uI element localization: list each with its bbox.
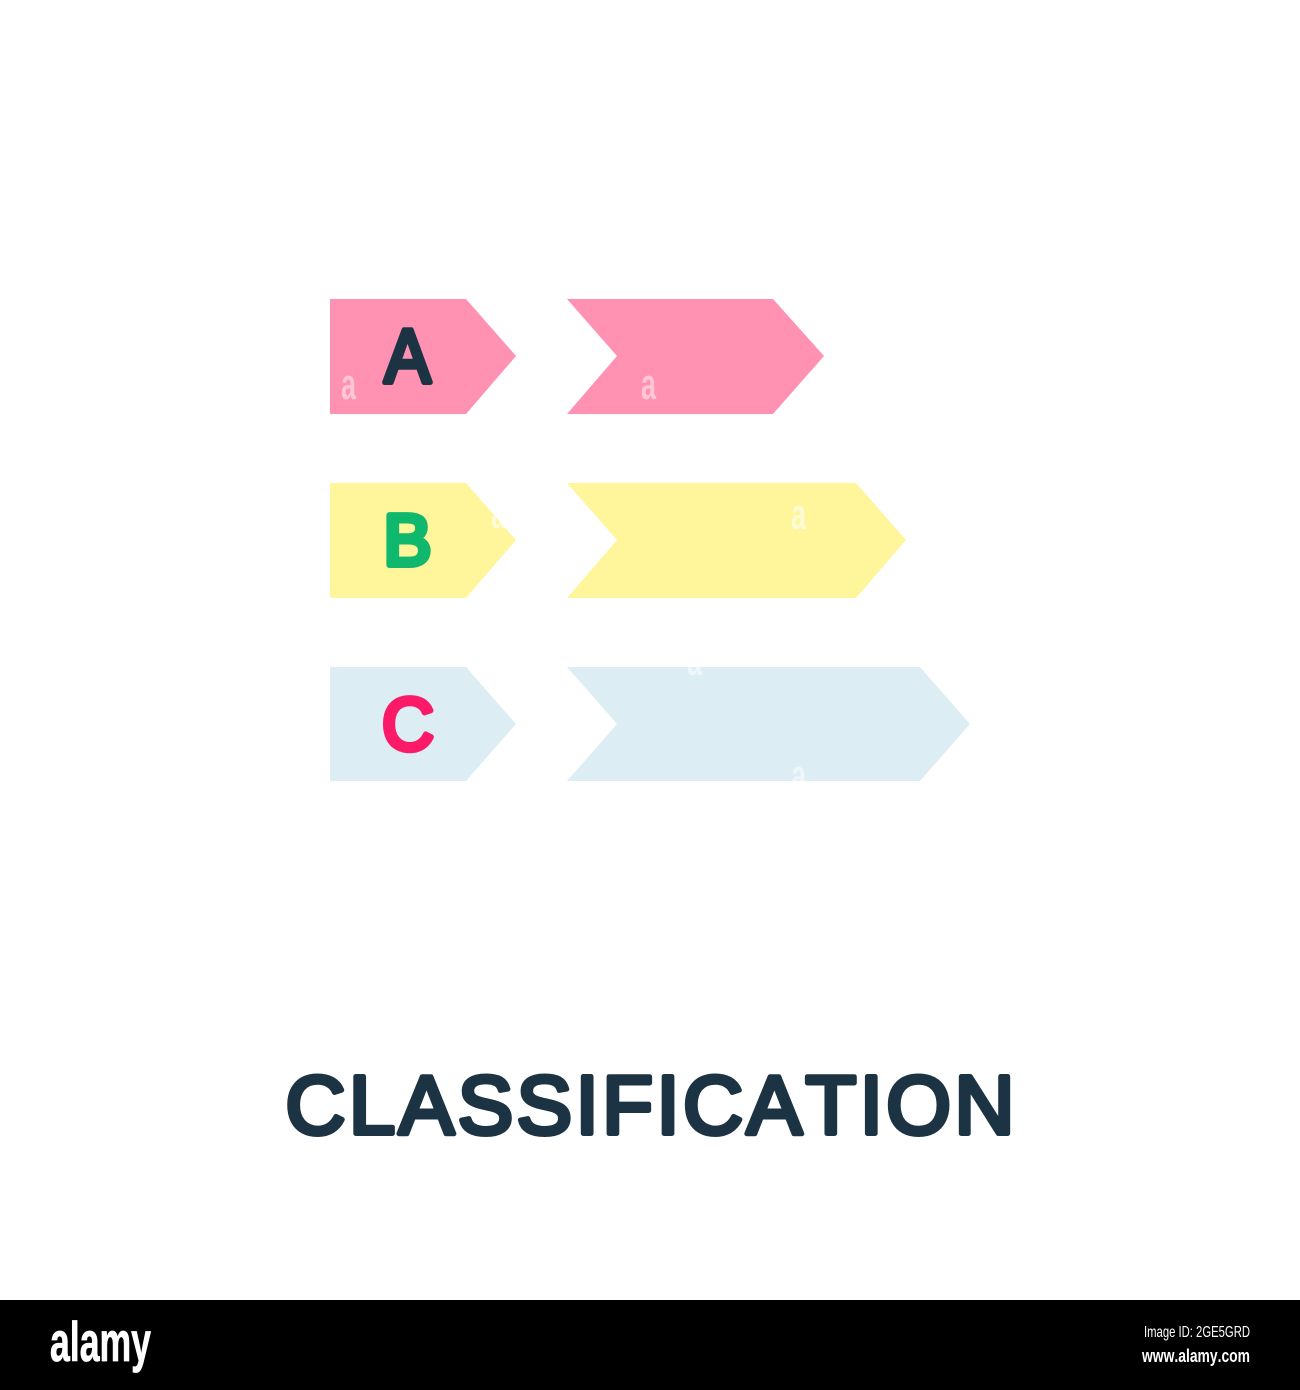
footer bar [0,1300,1300,1390]
label tag C [330,667,516,781]
row C: pale blue label and arrow [330,667,970,781]
arrow bar B [567,483,906,598]
row A: pink label and arrow [330,299,824,414]
infographic canvas [0,299,1300,1390]
website: www.alamy.com [1141,1346,1250,1366]
title: CLASSIFICATION [286,1058,1014,1152]
watermark marks on row A [341,360,656,409]
letter A: A [384,314,431,400]
alamy logo: alamy [50,1310,151,1373]
letter B: B [384,501,432,581]
label tag B [330,483,516,598]
arrow bar A [567,299,824,414]
arrow bar C [567,667,970,781]
watermark marks on row A: a [341,360,356,409]
label tag A [330,299,516,414]
watermark marks on row C: a [687,636,702,685]
watermark mark on tag B: a [491,489,506,538]
row B: yellow label and arrow [330,483,906,598]
image id: Image ID: 2GE5GRD [1144,1324,1250,1341]
watermark marks on row A: a [641,360,656,409]
watermark marks on row C: a [791,751,806,800]
watermark mark on row B: a [791,490,806,539]
watermark marks on row C [688,667,804,781]
letter C: C [382,683,434,766]
